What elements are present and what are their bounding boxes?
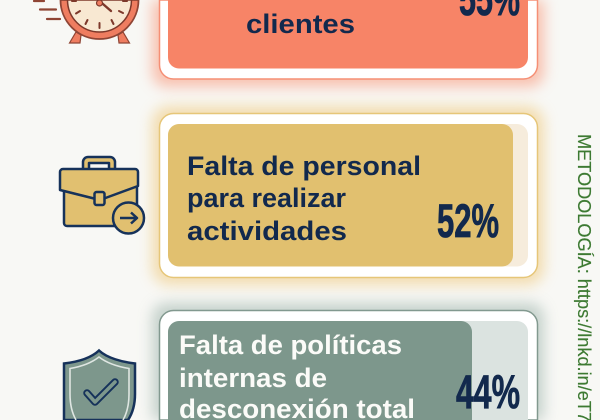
card 3 label: Falta de políticas [179, 330, 402, 360]
card 2 value: 52% [437, 194, 499, 247]
panel: card 3 politicas 44% [152, 303, 544, 420]
panel: card 1 clientes 55% [152, 0, 544, 87]
icon: shield with check [64, 350, 135, 420]
icon: alarm clock [34, 0, 138, 43]
card 2 label [187, 151, 421, 246]
card 1 label: clientes [246, 9, 355, 39]
methodology vertical text: METODOLOGÍA: https://lnkd.in/eT7 [574, 134, 594, 420]
card 2 label: para realizar [187, 183, 346, 213]
card 3 label [179, 330, 415, 420]
card 3 value: 44% [456, 365, 520, 418]
icon: briefcase with arrow [60, 157, 144, 234]
speed lines [34, 1, 60, 19]
panel: card 2 falta de personal 52% [152, 106, 544, 285]
card 2 label: actividades [187, 216, 347, 246]
card 2 label: Falta de personal [187, 151, 421, 181]
card 3 label: internas de [179, 363, 327, 393]
